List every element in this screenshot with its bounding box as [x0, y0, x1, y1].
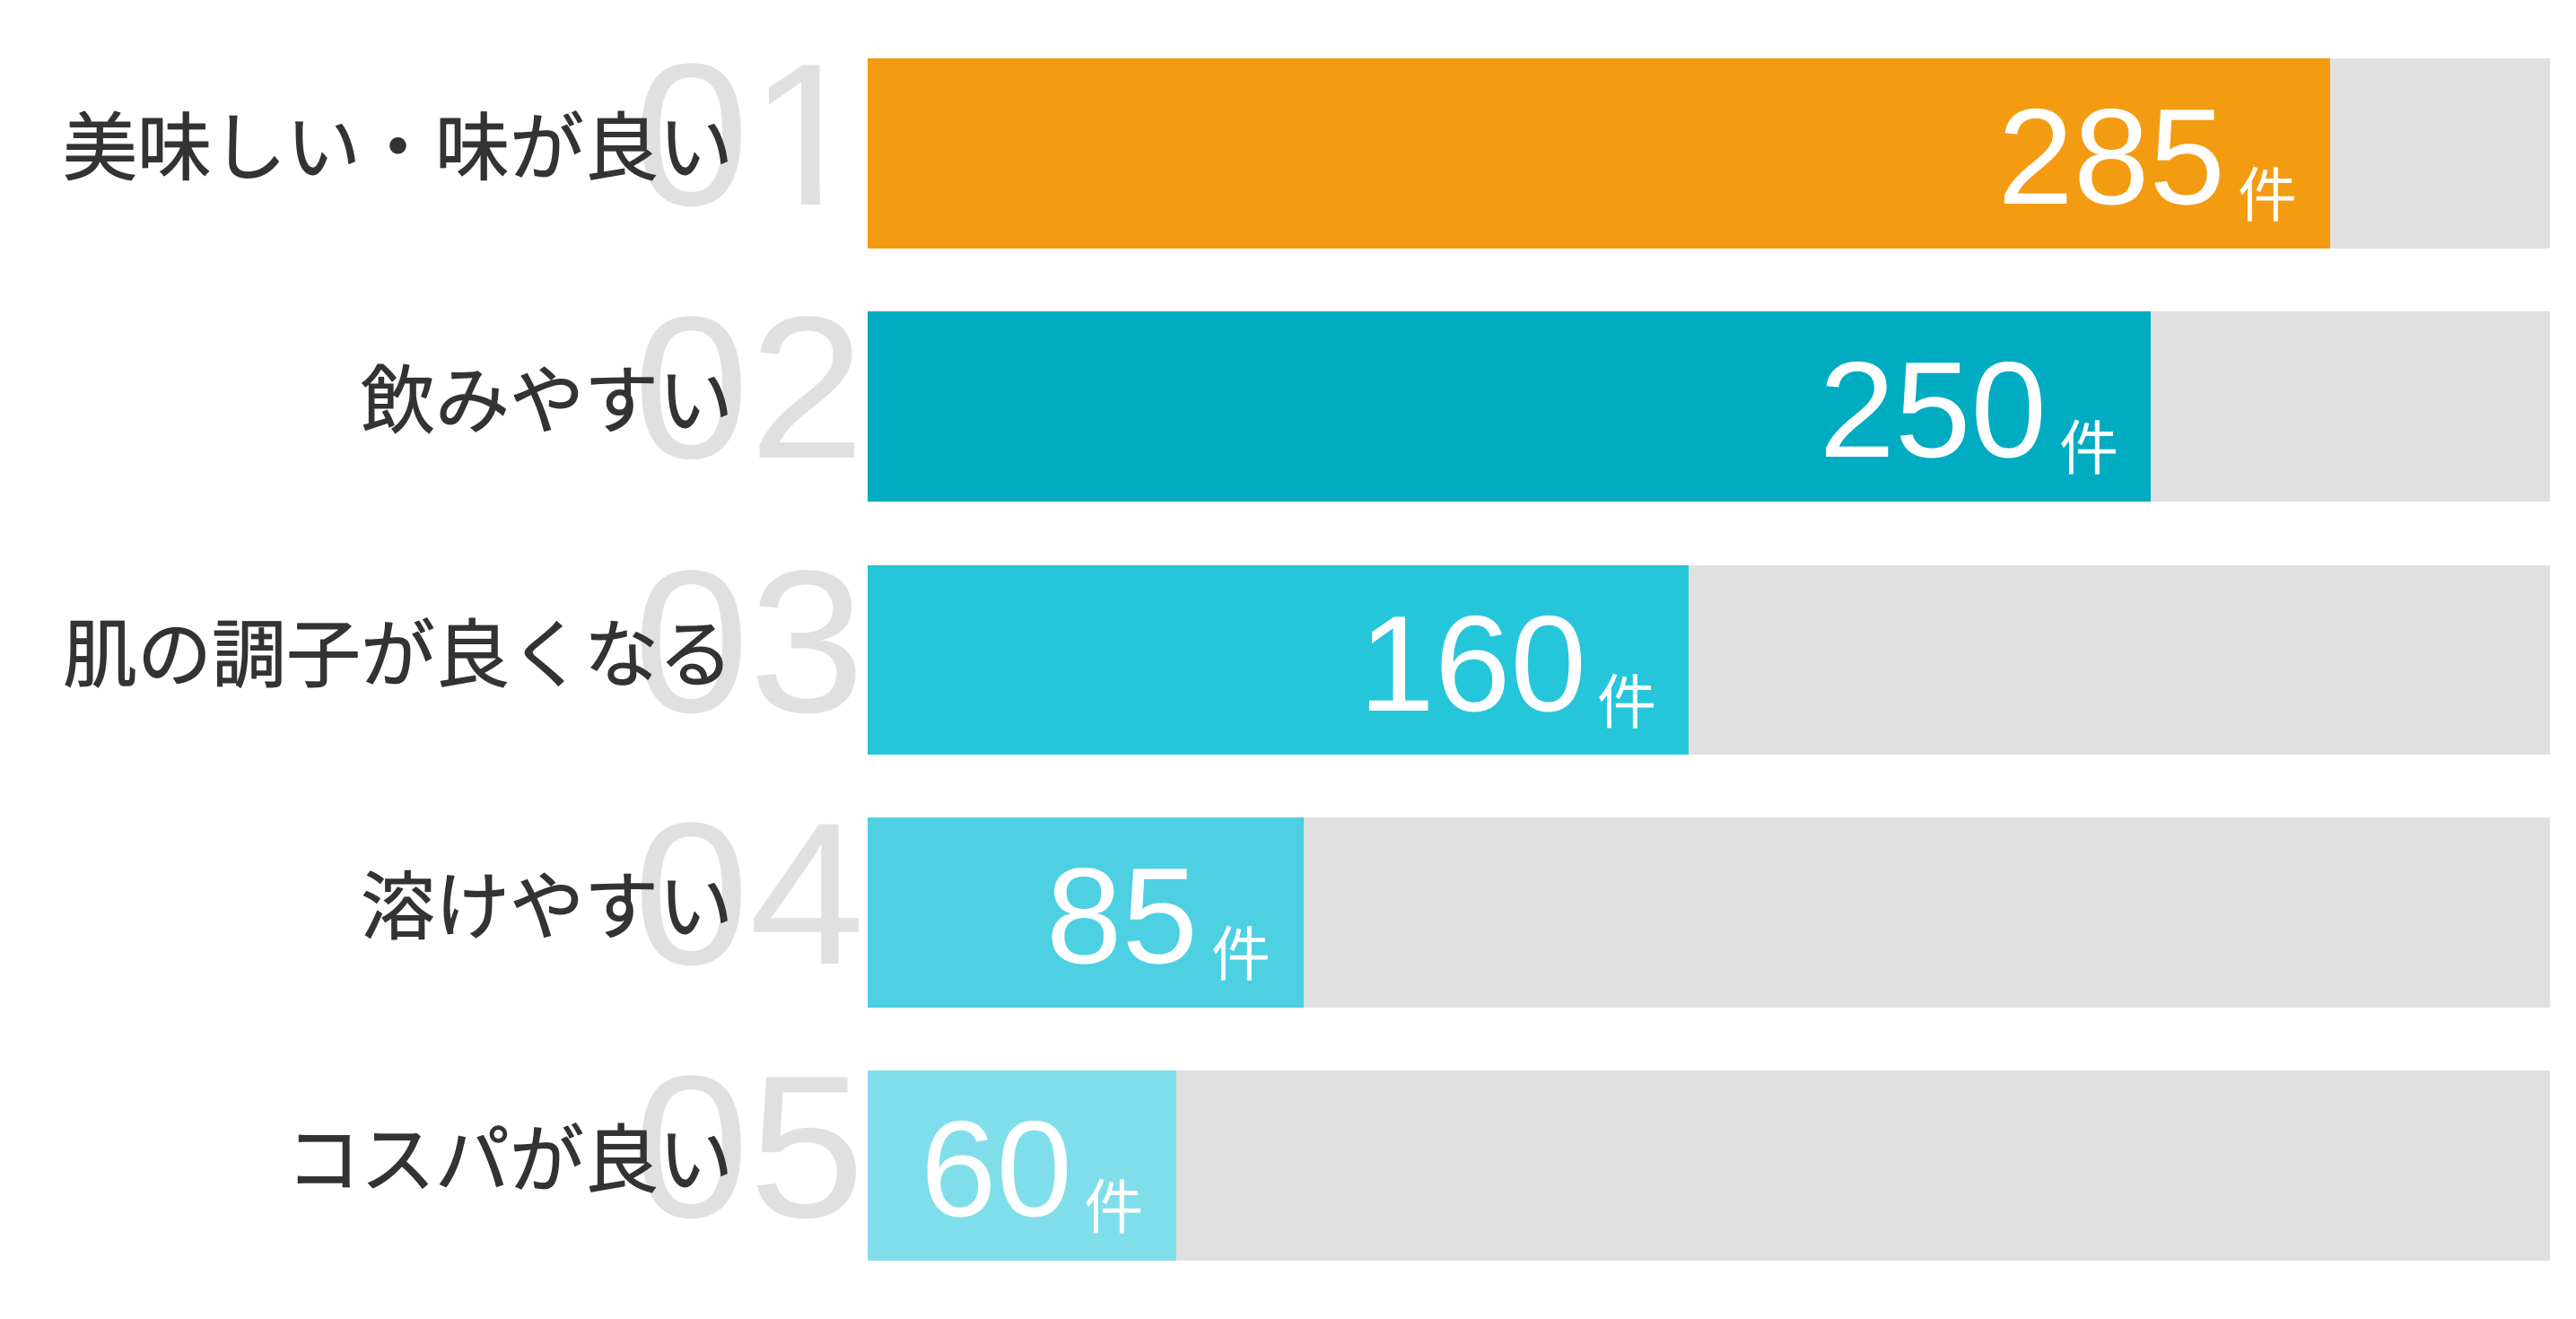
bar fill 2	[868, 311, 2151, 502]
label 1: 美味しい・味が良い	[63, 107, 733, 190]
value 160: 160	[1358, 588, 1586, 740]
bar track 2	[868, 311, 2550, 502]
unit 2: 件	[2059, 415, 2118, 482]
label 2: 飲みやすい	[361, 360, 733, 443]
value 250: 250	[1819, 334, 2047, 486]
bar fill 1	[868, 58, 2330, 249]
row 3: 肌の調子が良くなる	[63, 529, 2550, 755]
bar track 3	[868, 565, 2550, 755]
unit 4: 件	[1211, 922, 1271, 988]
row 1: 美味しい・味が良い	[63, 22, 2550, 249]
value 85: 85	[1046, 840, 1198, 992]
row 4: 溶けやすい	[361, 782, 2550, 1008]
unit 5: 件	[1084, 1175, 1143, 1241]
bar track 5	[868, 1070, 2550, 1261]
value 285: 285	[1997, 81, 2225, 233]
rank number 02: 02	[633, 275, 865, 501]
rank number 01: 01	[633, 22, 865, 248]
row 2: 飲みやすい	[361, 275, 2550, 502]
label 4: 溶けやすい	[361, 866, 733, 949]
bar track 1	[868, 58, 2550, 249]
bar fill 3	[868, 565, 1689, 755]
label 5: コスパが良い	[286, 1119, 733, 1202]
label 3: 肌の調子が良くなる	[63, 614, 733, 697]
unit 3: 件	[1597, 669, 1656, 736]
rank number 04: 04	[633, 782, 865, 1007]
bar track 4	[868, 817, 2550, 1008]
bar fill 4	[868, 817, 1304, 1008]
value 60: 60	[921, 1093, 1072, 1245]
bar fill 5	[868, 1070, 1176, 1261]
rank number 03: 03	[633, 529, 865, 755]
row 5: コスパが良い	[286, 1035, 2550, 1261]
rank number 05: 05	[633, 1035, 865, 1260]
unit 1: 件	[2238, 162, 2297, 229]
